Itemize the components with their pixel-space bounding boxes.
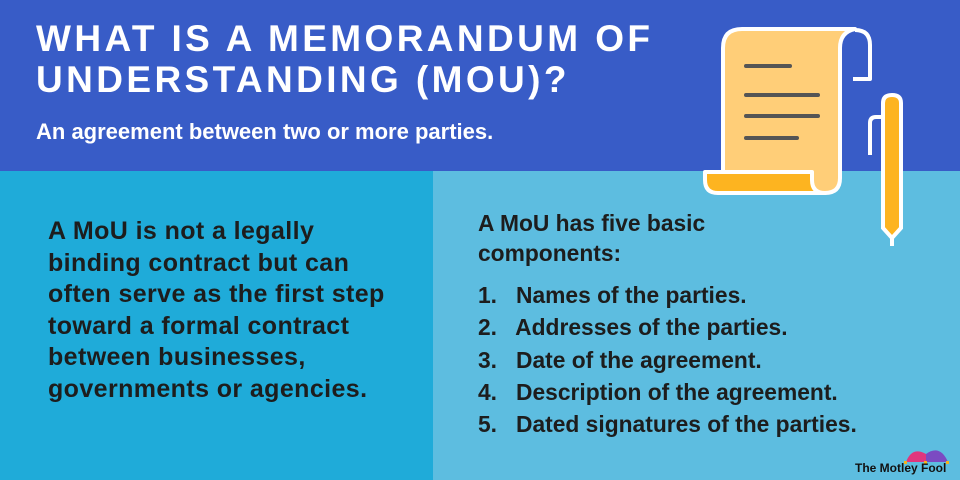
text block: left description: toward a formal contract <box>48 312 349 340</box>
text block: left description: between businesses, <box>48 343 306 371</box>
text block: components list: A MoU has five basic <box>478 210 705 236</box>
text block: components list <box>478 210 857 437</box>
text block: components list: 5. Dated signatures of the parties. <box>478 411 857 437</box>
text block: left description: governments or agencies. <box>48 374 367 402</box>
logo: The Motley Fool: The Motley Fool <box>855 461 946 475</box>
header band <box>0 0 960 171</box>
text block: components list: 4. Description of the agreement. <box>478 379 838 405</box>
text block: left description: binding contract but can <box>48 248 349 276</box>
text block: left description: often serve as the first step <box>48 280 385 308</box>
text block: components list: 2. Addresses of the parties. <box>478 314 788 340</box>
logo: The Motley Fool <box>855 450 949 475</box>
text block: left description <box>48 217 385 402</box>
panel: left description <box>0 171 433 480</box>
text block: left description: A MoU is not a legally <box>48 217 314 245</box>
title: WHAT IS A MEMORANDUM OF <box>36 18 653 59</box>
panel: right components <box>433 171 960 480</box>
subtitle: An agreement between two or more parties. <box>36 119 493 144</box>
text block: components list: components: <box>478 240 621 266</box>
title: UNDERSTANDING (MOU)? <box>36 59 570 100</box>
text block: components list: 1. Names of the parties. <box>478 282 747 308</box>
text block: components list: 3. Date of the agreement. <box>478 347 762 373</box>
title <box>36 18 653 100</box>
